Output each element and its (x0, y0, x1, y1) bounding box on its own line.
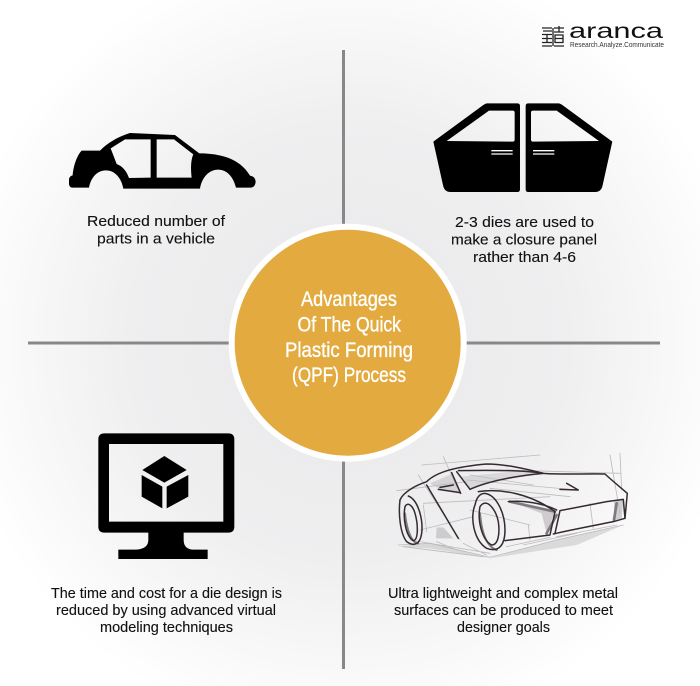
icon: car body shell (69, 133, 256, 189)
text: lightweight surfaces: Ultra lightweight and complex metal (388, 586, 618, 602)
title: Plastic Forming (285, 339, 413, 362)
center circle (229, 224, 467, 462)
text: dies (451, 215, 597, 266)
text: reduced parts: parts in a vehicle (97, 232, 215, 248)
logo: aranca: Research.Analyze.Communicate (570, 42, 664, 49)
icon: monitor with cube (98, 433, 234, 559)
logo: aranca (542, 19, 664, 49)
title: Advantages (301, 288, 397, 311)
text: die design (51, 586, 282, 636)
title: Of The Quick (298, 314, 401, 336)
text: die design: modeling techniques (100, 620, 233, 636)
text: reduced parts (87, 214, 226, 248)
text: lightweight surfaces: surfaces can be produced to meet (394, 603, 613, 619)
title: (QPF) Process (292, 364, 406, 387)
text: dies: 2-3 dies are used to (455, 215, 594, 231)
text: die design: reduced by using advanced virtual (56, 603, 276, 619)
text: dies: rather than 4-6 (473, 250, 576, 266)
text: lightweight surfaces (388, 586, 618, 636)
text: die design: The time and cost for a die design is (51, 586, 282, 602)
right door (526, 103, 612, 192)
text: lightweight surfaces: designer goals (457, 620, 550, 636)
logo: aranca: aranca (569, 19, 663, 43)
text: dies: make a closure panel (451, 232, 597, 248)
sketch: sports car (397, 453, 627, 558)
title (285, 288, 413, 387)
icon: door panels (433, 103, 612, 192)
left door (433, 103, 520, 192)
text: reduced parts: Reduced number of (87, 214, 226, 230)
